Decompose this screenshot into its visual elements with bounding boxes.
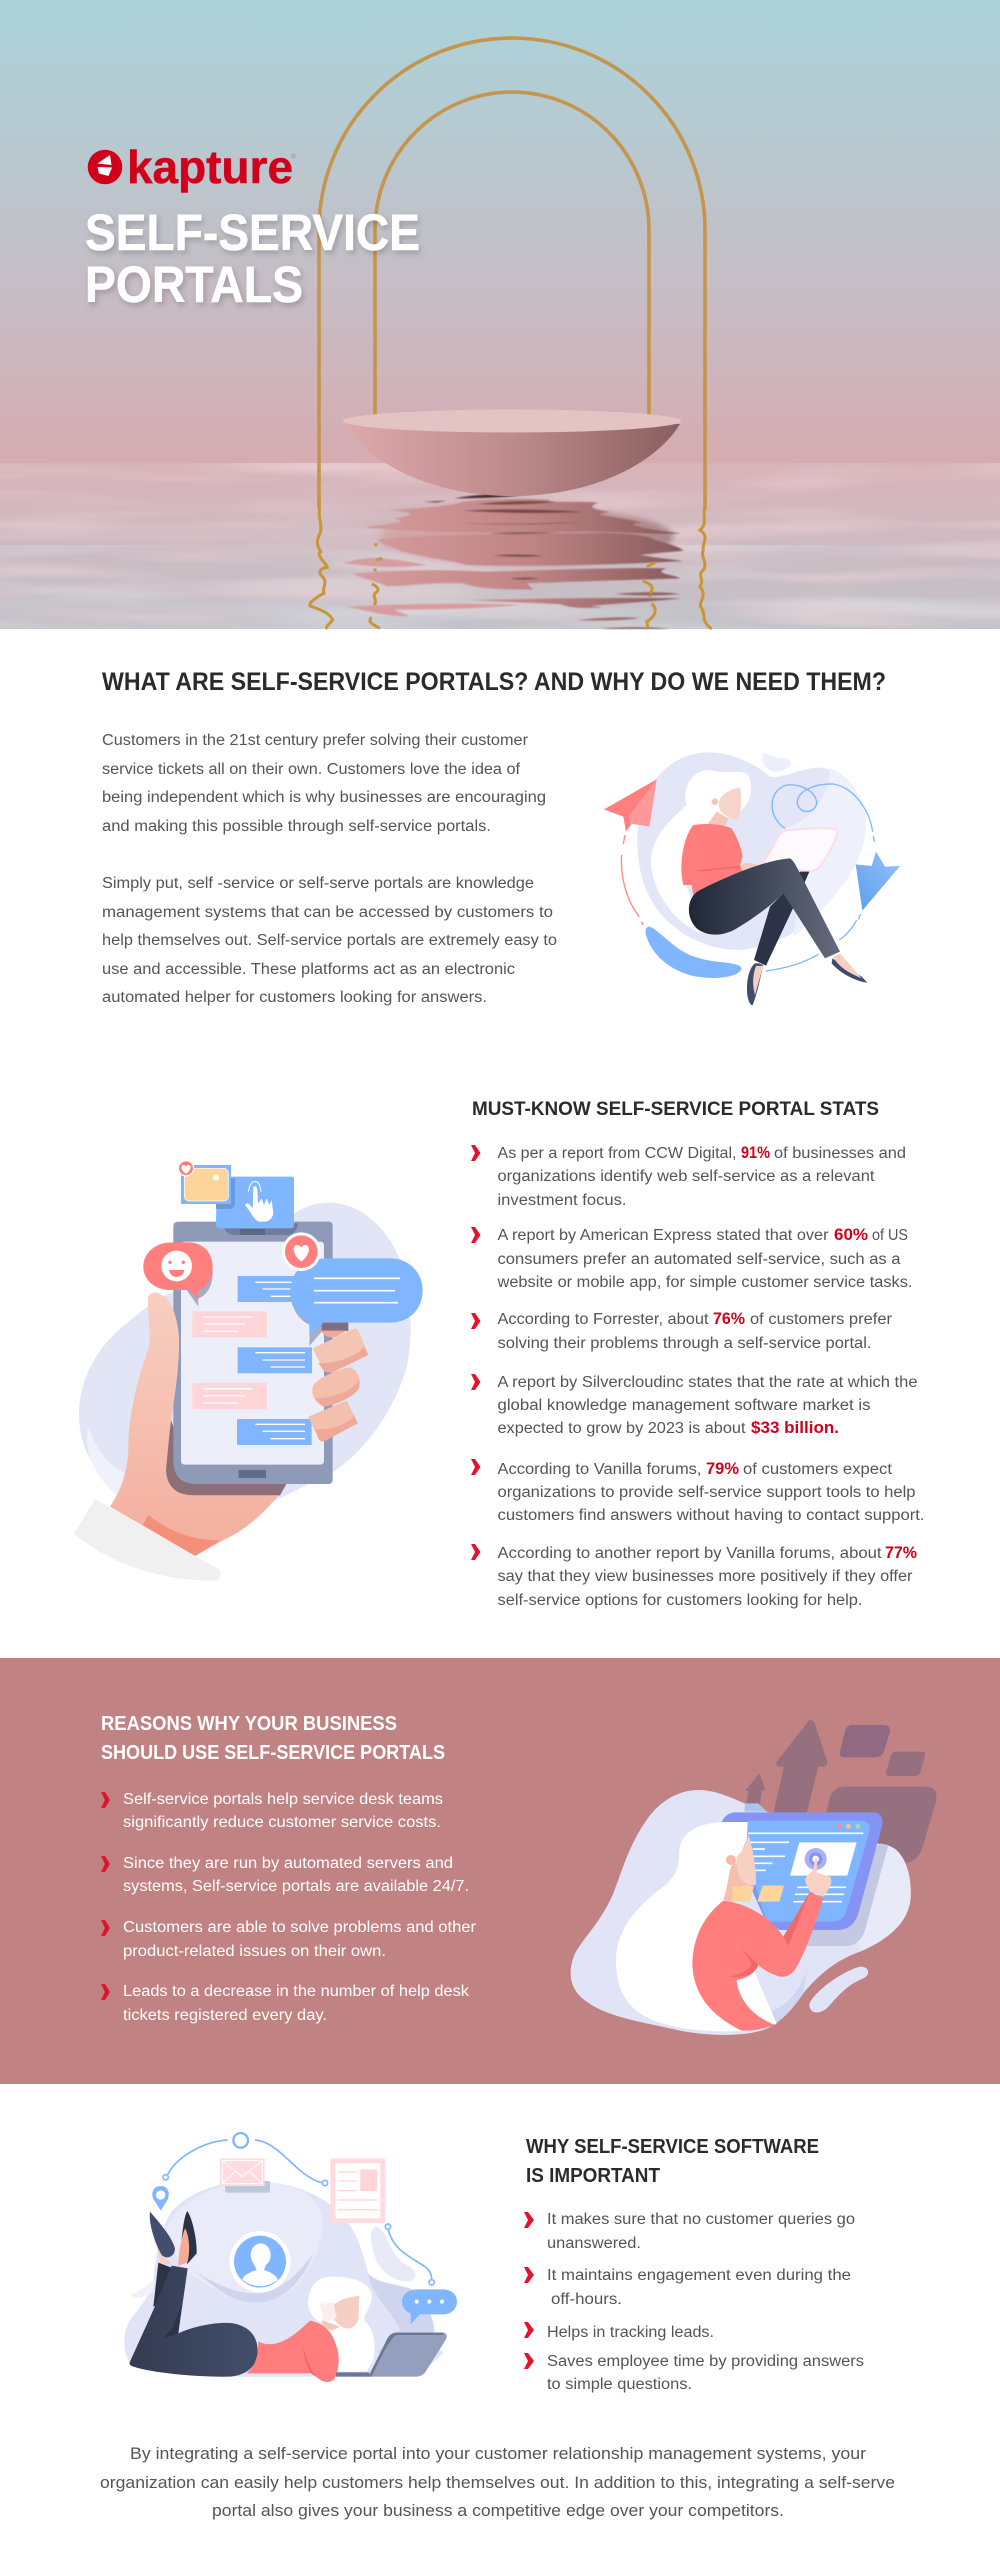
reasons list: significantly reduce customer service costs. [123, 1814, 441, 1831]
importance list: It makes sure that no customer queries go [547, 2211, 855, 2228]
closing paragraph: portal also gives your business a competitive edge over your competitors. [212, 2502, 784, 2520]
heading: IS IMPORTANT [526, 2165, 660, 2187]
heading: SHOULD USE SELF-SERVICE PORTALS [101, 1742, 445, 1764]
stat: American Express 60%: 60% [834, 1226, 868, 1244]
intro paragraph one: and making this possible through self-service portals. [102, 818, 491, 835]
stat: Vanilla forums 77%: self-service options for customers looking for help. [498, 1592, 862, 1609]
stat: Silvercloudinc $33 billion: global knowledge management software market is [498, 1397, 871, 1414]
importance list: unanswered. [547, 2235, 641, 2252]
reasons list: Leads to a decrease in the number of help desk [123, 1983, 469, 2000]
importance list: off-hours. [551, 2291, 622, 2308]
stat: Vanilla forums 77%: According to another report by Vanilla forums, about [498, 1545, 882, 1562]
section background [0, 1658, 1000, 2084]
closing paragraph [100, 2445, 895, 2520]
reasons list: systems, Self-service portals are available 24/7. [123, 1878, 469, 1895]
stat: American Express 60% [496, 1226, 912, 1291]
intro paragraph one: being independent which is why businesses are encouraging [102, 789, 546, 806]
intro paragraph two [102, 875, 557, 1006]
stat: Silvercloudinc $33 billion: $33 billion. [751, 1419, 839, 1437]
logo: kapture: kapture [127, 141, 293, 193]
stat: CCW Digital 91% [498, 1144, 906, 1209]
stat: American Express 60%: website or mobile app, for simple customer service tasks. [496, 1274, 912, 1291]
arch reflections [310, 500, 712, 629]
intro paragraph one: service tickets all on their own. Customers love the idea of [102, 761, 521, 778]
reasons list [123, 1791, 476, 2024]
stat: CCW Digital 91%: 91% [741, 1144, 770, 1162]
reasons list: product-related issues on their own. [123, 1943, 386, 1960]
importance list: to simple questions. [547, 2376, 692, 2393]
panel: hero banner [0, 0, 1000, 629]
heading: MUST-KNOW SELF-SERVICE PORTAL STATS [472, 1098, 879, 1120]
stat: CCW Digital 91%: organizations identify web self-service as a relevant [498, 1168, 875, 1185]
reasons list: Self-service portals help service desk teams [123, 1791, 443, 1808]
hero sky gradient [0, 0, 1000, 463]
stat: Vanilla forums 77% [498, 1544, 917, 1609]
illustration: hand holding phone [74, 1160, 423, 1581]
panel: reasons why your business [0, 1658, 1000, 2084]
stat: Vanilla forums 79%: According to Vanilla forums, [498, 1461, 702, 1478]
stat: Vanilla forums 79%: of customers expect [743, 1461, 893, 1478]
intro paragraph two: management systems that can be accessed by customers to [102, 904, 553, 921]
stat bullet icons [471, 1145, 480, 1560]
panel: what are self-service portals [102, 668, 900, 1006]
panel: must-know stats [74, 1098, 924, 1609]
stat: Vanilla forums 79% [498, 1460, 924, 1524]
reasons list: Since they are run by automated servers and [123, 1855, 453, 1872]
stat: Silvercloudinc $33 billion: expected to grow by 2023 is about [498, 1420, 746, 1437]
stat: Silvercloudinc $33 billion [498, 1374, 918, 1437]
stat: American Express 60%: consumers prefer an automated self-service, such as a [498, 1251, 901, 1268]
stat: American Express 60%: A report by American Express stated that over [498, 1227, 828, 1244]
stat: CCW Digital 91%: As per a report from CCW Digital, [498, 1145, 736, 1162]
stat: Forrester 76%: solving their problems through a self-service portal. [498, 1335, 872, 1352]
bullet icons [101, 1792, 110, 2000]
title [85, 204, 420, 313]
illustration: woman lying with laptop [124, 2133, 457, 2382]
bowl reflection in water [343, 494, 683, 629]
stat: CCW Digital 91%: of businesses and [774, 1145, 906, 1162]
reasons list: tickets registered every day. [123, 2007, 327, 2024]
heading [526, 2136, 819, 2187]
importance list: It maintains engagement even during the [547, 2267, 851, 2284]
intro paragraph one [102, 732, 546, 835]
reasons list: Customers are able to solve problems and other [123, 1919, 476, 1936]
stat: CCW Digital 91%: investment focus. [498, 1192, 626, 1209]
illustration: woman with tablet and paper planes [604, 752, 900, 1005]
intro paragraph one: Customers in the 21st century prefer solving their customer [102, 732, 528, 749]
stat: Forrester 76%: According to Forrester, about [498, 1311, 709, 1328]
bowl pedestal [343, 410, 681, 496]
importance list [547, 2211, 864, 2393]
closing paragraph: By integrating a self-service portal into your customer relationship management systems, your [130, 2445, 867, 2463]
stat: Silvercloudinc $33 billion: A report by Silvercloudinc states that the rate at which the [498, 1374, 918, 1391]
stat: Forrester 76%: of customers prefer [750, 1311, 892, 1328]
panel: why self-service software is important [124, 2133, 864, 2393]
heading: WHAT ARE SELF-SERVICE PORTALS? AND WHY DO WE NEED THEM? [102, 668, 886, 696]
intro paragraph two: Simply put, self -service or self-serve portals are knowledge [102, 875, 534, 892]
stat: Vanilla forums 77%: say that they view businesses more positively if they offer [498, 1568, 912, 1585]
stat: Vanilla forums 77%: 77% [885, 1544, 917, 1562]
title: SELF-SERVICE [85, 204, 420, 261]
logo: kapture: ® [291, 153, 297, 161]
closing paragraph: organization can easily help customers help themselves out. In addition to this, integrating a self-serve [100, 2474, 895, 2492]
intro paragraph two: automated helper for customers looking for answers. [102, 989, 487, 1006]
arch: inner gold [375, 92, 649, 420]
heading: REASONS WHY YOUR BUSINESS [101, 1713, 397, 1735]
hero water surface [0, 463, 1000, 629]
stat: Forrester 76% [498, 1310, 892, 1352]
stat: Vanilla forums 79%: organizations to provide self-service support tools to help [498, 1484, 916, 1501]
illustration: woman at touchscreen with growth arrows [571, 1720, 936, 2035]
heading [101, 1713, 445, 1764]
intro paragraph two: help themselves out. Self-service portals are extremely easy to [102, 932, 557, 949]
arch: outer gold [319, 38, 705, 508]
stat: Forrester 76%: 76% [713, 1310, 745, 1328]
importance list: Saves employee time by providing answers [547, 2353, 864, 2370]
stat: Vanilla forums 79%: 79% [706, 1460, 739, 1478]
stat: Vanilla forums 79%: customers find answers without having to contact support. [498, 1507, 924, 1524]
title: PORTALS [85, 256, 303, 313]
bullet icons [524, 2212, 534, 2369]
importance list: Helps in tracking leads. [547, 2324, 714, 2341]
intro paragraph two: use and accessible. These platforms act as an electronic [102, 961, 515, 978]
heading: WHY SELF-SERVICE SOFTWARE [526, 2136, 819, 2158]
stat: American Express 60%: of US [872, 1227, 908, 1244]
